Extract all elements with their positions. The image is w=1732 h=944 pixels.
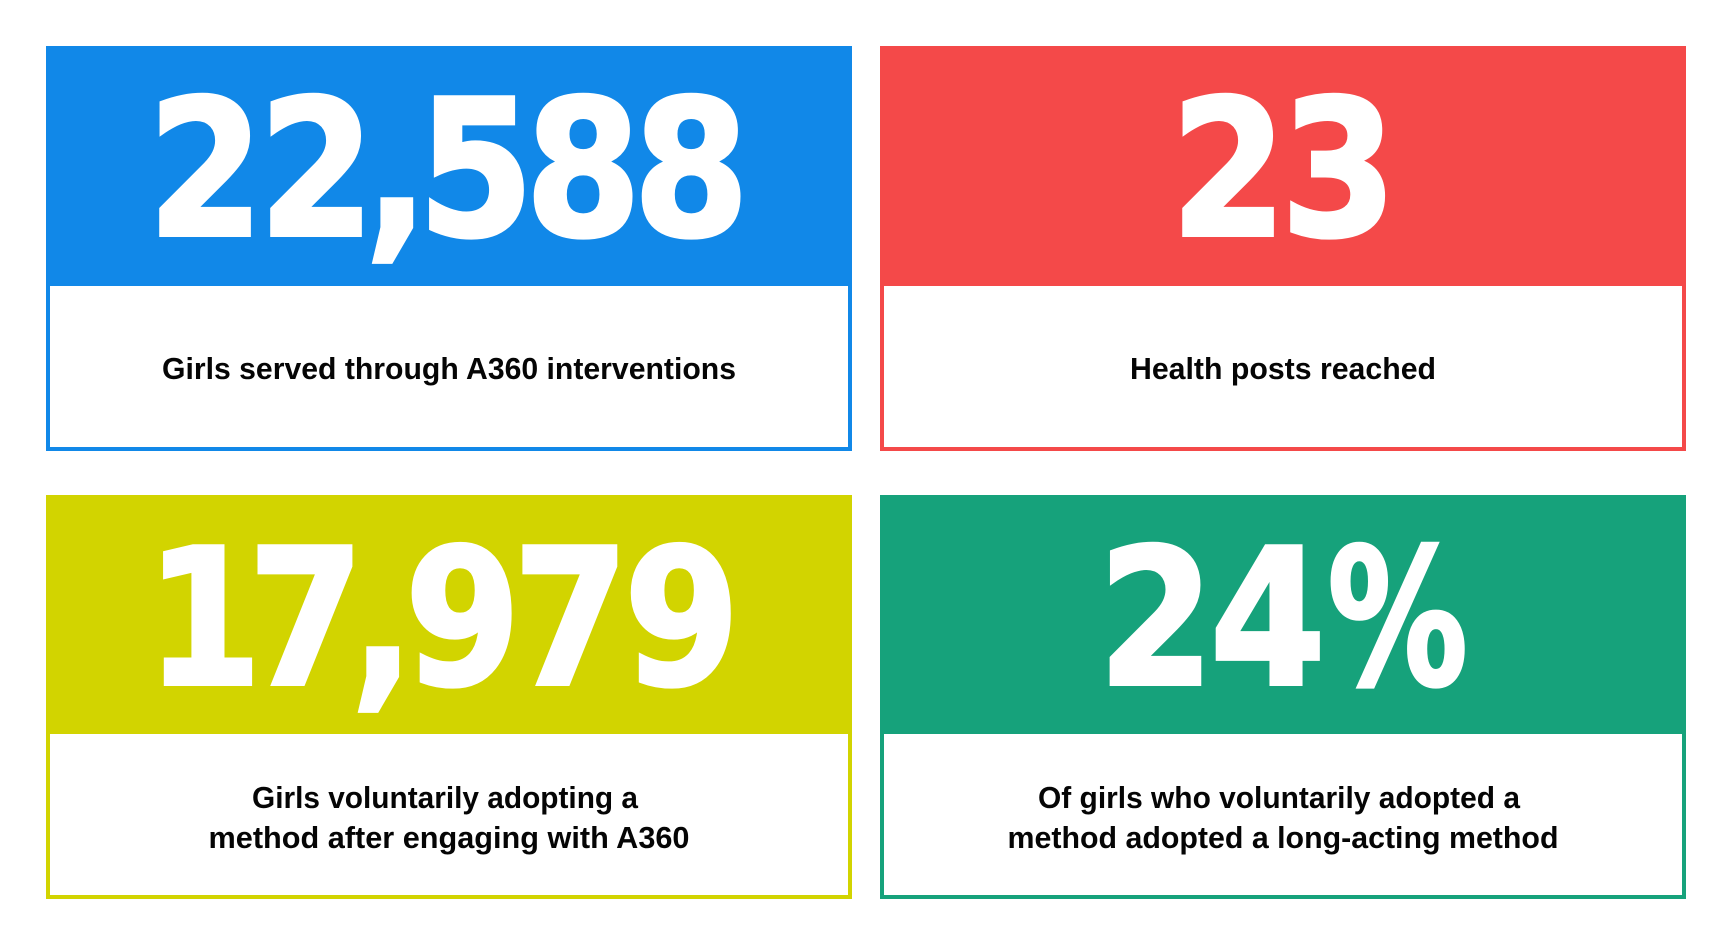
header band	[880, 46, 1686, 286]
header band	[880, 495, 1686, 734]
label	[208, 780, 690, 855]
card outline	[48, 497, 850, 897]
panel: girls served	[46, 46, 852, 449]
label: Girls served through A360 interventions	[162, 351, 736, 386]
card outline	[882, 497, 1684, 897]
card outline	[882, 48, 1684, 449]
label	[1008, 780, 1558, 855]
panel: voluntary adoption	[46, 495, 852, 897]
big number: 24%	[1098, 509, 1468, 729]
header band	[46, 495, 852, 734]
panel: long-acting share	[880, 495, 1686, 897]
label: Girls voluntarily adopting a	[252, 780, 639, 815]
label: method after engaging with A360	[208, 820, 690, 855]
label: Health posts reached	[1130, 351, 1436, 386]
label: Of girls who voluntarily adopted a	[1038, 780, 1521, 815]
panel: health posts	[880, 46, 1686, 449]
big number: 17,979: 17,979	[146, 509, 740, 729]
label: method adopted a long-acting method	[1008, 820, 1558, 855]
big number: 24%: 24	[1098, 509, 1326, 729]
big number: 23: 23	[1171, 60, 1397, 280]
big number: 24%: %	[1328, 510, 1468, 729]
big number: 22,588: 22,588	[148, 60, 749, 280]
card outline	[48, 48, 850, 449]
header band	[46, 46, 852, 286]
